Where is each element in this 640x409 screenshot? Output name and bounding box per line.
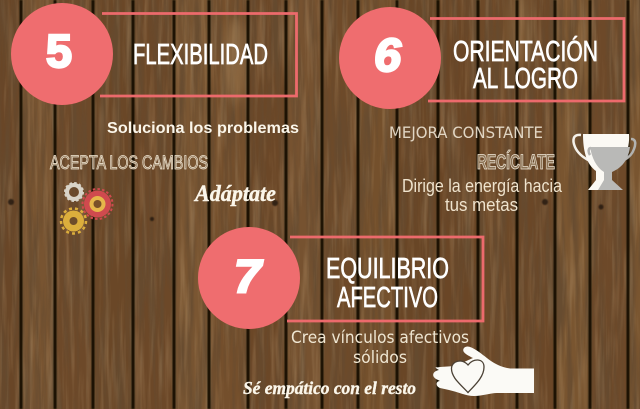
text: crea vínculos afectivos sólidos: sólidos	[353, 348, 407, 368]
text: sé empático con el resto: Sé empático con el resto	[243, 378, 416, 398]
text: recíclate: RECÍCLATE	[477, 151, 555, 174]
text: crea vínculos afectivos sólidos	[291, 328, 469, 368]
icon: trophy	[573, 134, 635, 190]
frame 7	[287, 237, 483, 321]
icon: hand holding heart	[433, 347, 534, 396]
number 6: 6	[374, 29, 401, 81]
heart	[451, 360, 484, 392]
text: dirige la energía hacia tus metas: Dirige la energía hacia	[402, 176, 563, 196]
number 7: 7	[234, 250, 264, 302]
hand	[433, 347, 534, 396]
heading: equilibrio afectivo	[326, 253, 449, 314]
circle 5	[11, 3, 113, 105]
heading: equilibrio afectivo: EQUILIBRIO	[326, 253, 449, 285]
yellow gear	[61, 208, 86, 234]
text: soluciona los problemas: Soluciona los problemas	[107, 120, 299, 137]
text: crea vínculos afectivos sólidos: Crea vínculos afectivos	[291, 328, 469, 348]
icon: gears	[61, 183, 112, 234]
heading: orientación al logro	[453, 35, 598, 95]
text: adáptate: Adáptate	[193, 181, 276, 206]
red gear	[82, 189, 112, 219]
frame 6	[428, 18, 624, 101]
gray trophy	[589, 139, 635, 190]
heading: orientación al logro: AL LOGRO	[473, 63, 578, 95]
text: dirige la energía hacia tus metas: tus metas	[445, 195, 518, 215]
section 5: flexibilidad	[11, 3, 296, 105]
frame 5	[100, 14, 296, 96]
text: dirige la energía hacia tus metas	[402, 176, 563, 215]
number 5: 5	[46, 25, 72, 77]
circle 6	[339, 7, 441, 109]
section 6: orientación al logro	[339, 7, 624, 109]
circle 7	[198, 227, 300, 329]
text: acepta los cambios: ACEPTA LOS CAMBIOS	[50, 153, 208, 174]
heading: equilibrio afectivo: AFECTIVO	[337, 282, 438, 314]
section 7: equilibrio afectivo	[198, 227, 483, 329]
white gear	[65, 183, 83, 201]
heading: flexibilidad: FLEXIBILIDAD	[133, 39, 268, 71]
text: mejora constante: MEJORA CONSTANTE	[389, 123, 543, 142]
white trophy	[573, 134, 629, 190]
